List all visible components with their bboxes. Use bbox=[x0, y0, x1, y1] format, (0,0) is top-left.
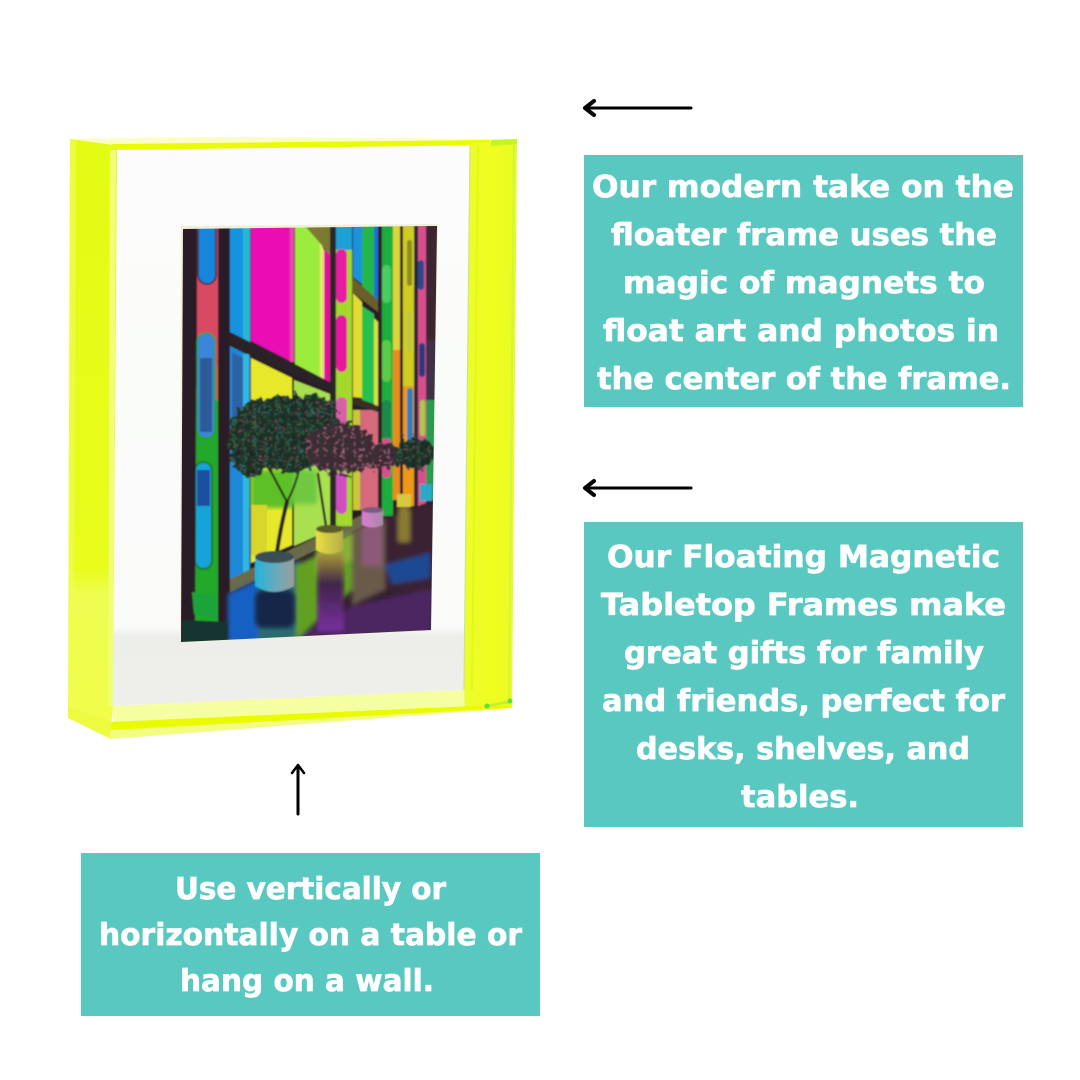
photo: green column bbox=[378, 226, 393, 526]
frame: bottom pale edge bbox=[68, 708, 512, 739]
callout: usage description: hang on a wall. bbox=[180, 964, 434, 999]
frame: bottom left corner bbox=[68, 707, 112, 738]
callout: gifts description: Tabletop Frames make bbox=[601, 588, 1006, 623]
frame: top pale edge bbox=[70, 137, 517, 150]
callout: gifts description: great gifts for family bbox=[624, 636, 984, 671]
arrow: bottom, pointing up to frame bbox=[292, 765, 304, 814]
callout: floater frame description: floater frame uses the bbox=[611, 218, 997, 253]
photo: tree canopies bbox=[227, 394, 435, 477]
callout: usage description: Use vertically or bbox=[175, 872, 446, 907]
photo: window sill bbox=[228, 515, 362, 594]
product: neon acrylic floating frame bbox=[68, 137, 517, 739]
callout: floater frame description: float art and photos in bbox=[603, 314, 999, 349]
callout: usage description bbox=[81, 853, 540, 1016]
photo: diagonal beam bbox=[228, 332, 332, 384]
frame: top yellow stripe bbox=[112, 140, 490, 150]
callout: usage description: horizontally on a table or bbox=[99, 918, 522, 953]
photo: tree trunks bbox=[268, 466, 326, 552]
frame: bottom pale band bbox=[113, 690, 465, 722]
callout: floater frame description: magic of magnets to bbox=[623, 266, 985, 301]
photo: top diagonal beam bbox=[305, 226, 330, 255]
frame: right bottom green accent bbox=[484, 698, 512, 708]
callout: floater frame description: the center of the frame. bbox=[597, 362, 1011, 397]
photo: left column pink and green bbox=[195, 226, 218, 623]
arrow: middle, pointing left to frame bbox=[585, 481, 691, 495]
photo: pots bbox=[255, 484, 432, 592]
callout: gifts description: and friends, perfect for bbox=[602, 684, 1005, 719]
photo card edge bbox=[180, 224, 438, 643]
callout: floater frame description: Our modern take on the bbox=[592, 170, 1014, 205]
frame: right band dividing lines bbox=[464, 142, 514, 705]
frame: bottom yellow stripe bbox=[110, 706, 512, 731]
photo: green base of left column bbox=[192, 592, 218, 620]
photo: pink far columns bbox=[414, 226, 437, 506]
photo: stained glass atrium bbox=[175, 220, 445, 650]
photo: lower window panes bbox=[230, 346, 330, 590]
callout: floater frame description bbox=[584, 155, 1023, 407]
photo: orange and yellow columns bbox=[393, 226, 414, 506]
photo: dark lower left corner bbox=[181, 620, 228, 645]
frame: left acrylic band bbox=[68, 139, 117, 738]
photo: dark columns bbox=[192, 228, 336, 620]
photo: dark base bbox=[181, 226, 437, 623]
arrow: top, pointing left to frame bbox=[585, 101, 691, 115]
photo: yellow green column bbox=[336, 226, 352, 526]
callout: gifts description: Our Floating Magnetic bbox=[607, 540, 1000, 575]
photo: middle window section bbox=[352, 226, 378, 510]
frame: right acrylic band bbox=[464, 139, 517, 712]
frame: right top green corner bbox=[491, 139, 517, 146]
photo: floor with reflections bbox=[224, 502, 432, 640]
photo: left column ovals bbox=[195, 222, 216, 569]
frame: left band inner highlight bbox=[108, 150, 116, 706]
frame: left band outer edge bbox=[68, 139, 76, 718]
photo: upper window panes bbox=[230, 226, 330, 383]
frame: white mat bbox=[113, 146, 470, 706]
callout: gifts description: tables. bbox=[741, 780, 859, 815]
callout: gifts description: desks, shelves, and bbox=[636, 732, 970, 767]
callout: gifts description bbox=[584, 522, 1023, 827]
